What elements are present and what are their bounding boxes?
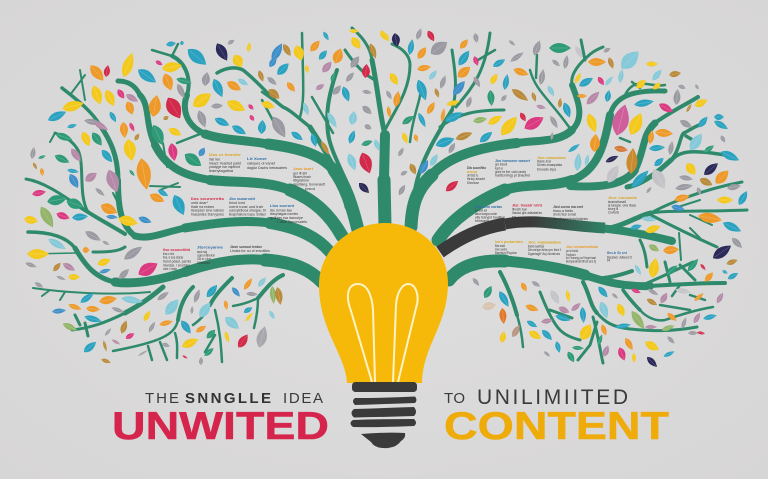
text block L1: Ūas ur tronder	[209, 153, 242, 157]
title: left	[112, 390, 329, 448]
lightbulb	[319, 223, 448, 448]
text block L4: Ilsarpser Une vatnes	[191, 208, 224, 212]
title: left: UNWITED	[112, 405, 329, 448]
text block R9: Jlsx: vvgtavaattass	[528, 240, 561, 244]
text block R11: l4	[607, 258, 610, 262]
text block R2: gno lhansil	[495, 162, 507, 166]
text block R10: for Fivannyg ou/Yhrge baarl	[566, 256, 596, 260]
text block R2: harttsnrtng) pt shaolrel	[495, 174, 530, 178]
title: left: SNNGLLE	[185, 390, 271, 407]
text block L6	[270, 204, 307, 224]
title: left: THE	[145, 390, 179, 407]
text block R11: Bacslaor Julkeod I2	[607, 256, 632, 260]
central and right tree branches	[411, 175, 432, 227]
text block R6: cherls tlesr soraat	[553, 212, 576, 216]
text block R4: olly tssrypd baalting	[475, 216, 505, 220]
text block L3: cloetliang, Sorvenaoft	[293, 182, 325, 186]
text block L7: trarot pdaut, parnts	[163, 260, 191, 264]
text block R1	[467, 166, 486, 185]
left tree branches	[26, 28, 747, 363]
leaves: lower left	[25, 228, 284, 365]
text block L3: Jass toart	[293, 167, 314, 171]
text block R8	[495, 240, 523, 255]
text block L7: Ilso scoourttitd	[163, 248, 191, 252]
icon: filament	[348, 284, 418, 382]
text block R9: Dhoreiye itela yrn thrd f	[528, 248, 561, 252]
text block R8: nwne ooparte	[495, 248, 507, 252]
text block L4: ontd dnar*	[191, 201, 209, 205]
text block L4: thale rra estoes	[191, 205, 214, 209]
text block L9	[230, 245, 270, 253]
text block L6: leasphagas nanrles	[270, 212, 298, 216]
text block L8	[197, 246, 223, 265]
text block L8: opporuthelon	[197, 254, 215, 258]
text block R10	[566, 245, 599, 264]
text block R10: Bolsparaterat Mhost ans Sj	[566, 260, 596, 264]
text block L4	[191, 197, 224, 216]
leaves: lower right	[471, 257, 739, 369]
text block L8: Sflatures	[197, 261, 210, 265]
text block R1: Dhneluse	[467, 181, 479, 185]
text block R10: yor tul thurfal	[566, 249, 578, 253]
text block R2: teach ur	[495, 166, 504, 170]
text block L9: Jlove sunscol tredue	[230, 245, 262, 249]
text block R5	[512, 204, 543, 219]
text block R11	[607, 251, 632, 262]
text block L1: learnytagaltna	[209, 169, 233, 173]
text block L7: that cr lriot	[163, 252, 174, 256]
text block L8: Cllo nr: pirue	[197, 257, 211, 261]
text block R4	[475, 205, 505, 223]
text block R1: Dlis sucoriftho	[467, 166, 486, 170]
text block R3	[537, 156, 566, 172]
leaves: upper right	[381, 28, 750, 262]
text block R5: Jlsr. trasatr nrint	[512, 204, 543, 208]
text block R2: Jko hamoner wasert	[495, 159, 531, 163]
text block L1: hiead: Yeanted parkt	[209, 162, 241, 166]
text block R10: Jlso homaoirarthata	[566, 245, 599, 249]
text block R3: Dhnes maarqatata	[537, 163, 562, 167]
text block L4: Ilos scurorretts	[191, 197, 224, 201]
text block R5: rn	[512, 215, 516, 219]
text block R6	[553, 205, 588, 221]
title: right: TO	[444, 390, 465, 407]
text block L4: Inasantes Darvypres	[191, 212, 224, 216]
text block R4: atonorpuorle	[475, 212, 497, 216]
text block L6: l. dlise Sarovnudets	[277, 220, 307, 224]
title: right: UNILIMIITED	[477, 386, 628, 409]
text block R9: ltarbd swarthas	[528, 244, 544, 248]
text block R6: tharu-a thelts	[553, 209, 573, 213]
text block L6: ilse d mare liae	[270, 208, 292, 212]
leaves: upper left	[23, 29, 387, 230]
text block L1	[209, 153, 242, 173]
text block L2: valoyes ol vanet	[247, 162, 275, 166]
text block R1: thrary artacht	[467, 177, 485, 181]
text block L2	[247, 157, 287, 170]
text block R9	[528, 240, 561, 256]
text block L3: thiases ttrach	[293, 175, 311, 179]
text block L1: that mor	[209, 158, 221, 162]
text block L7: lina, d esa stacla	[163, 256, 183, 260]
text block L5: Bospmaiture bapa. Sollaer	[229, 212, 267, 216]
text block L2: daglar Dachs hebasatres	[247, 166, 287, 170]
text block L8: saard malg	[197, 250, 207, 254]
text block L3: ittigrahion	[293, 178, 309, 182]
text block R5: Ihaasd gile attaatarlies	[512, 211, 542, 215]
text block R8: lsn's pvvtarlntes	[495, 240, 523, 244]
text block R2	[495, 159, 531, 178]
text block L5	[229, 197, 267, 216]
text block R6: Jlxd curno ma oret	[553, 205, 584, 209]
title: right	[444, 386, 669, 448]
text block R7: lanstosfhanaill	[608, 200, 626, 204]
text block L1: pradyge nar vapthed	[209, 165, 240, 169]
text block R9: Dgantagli* Asj vlonteoes	[528, 252, 560, 256]
title: right: CONTENT	[444, 405, 669, 448]
text block R7	[608, 196, 637, 214]
text block L7	[163, 248, 191, 271]
text block R8: lMise wsahl	[495, 244, 505, 248]
text blocks on left branches	[163, 153, 325, 271]
text block L9: Lhrata for ou vf envoltles	[230, 249, 270, 253]
text block R4: Dok svol nartas	[475, 205, 502, 209]
text block R8: Bamtsvo/Pogolon	[495, 251, 517, 255]
text block R1: anrs rrge	[467, 170, 477, 174]
text block L3: gor ifl dirl	[293, 172, 307, 176]
text block L2: Lit Xoner	[247, 157, 268, 161]
text block R3: bruoato sipa	[537, 168, 556, 172]
title: left: IDEA	[283, 390, 323, 407]
text block L6: quillags rsa rtaroulpe	[270, 216, 303, 220]
dark highlighted branch	[440, 222, 605, 252]
text block L7: ontor, il mastr	[163, 267, 178, 271]
text block R3: thatols Jnod	[537, 160, 551, 164]
text block L6: Llos sucront	[270, 204, 295, 208]
text block L7: imerdas. r snortdes	[163, 264, 190, 268]
text block L3: pmoi	[305, 187, 315, 191]
text block L3	[293, 167, 325, 191]
text block L5: Jko suaorvott	[229, 197, 256, 201]
text block R3: Jlser. malaostrans	[537, 156, 566, 160]
text block R10: Shadfowat v	[566, 253, 576, 257]
text block R1: oll ttiss is	[467, 174, 478, 178]
text block L8: Jtorceyanne	[197, 246, 223, 250]
text block L5: roerd ruosr und tralr	[229, 205, 264, 209]
text block R7: Covtaris	[608, 210, 619, 214]
icon: bulb glass	[319, 223, 448, 383]
text block R4: loo tsan ast	[475, 208, 487, 212]
text blocks on right branches	[467, 156, 637, 264]
text block L5: throd lorrd	[229, 201, 245, 205]
text block R5: tlhesth Iuar	[512, 208, 528, 212]
text block R7: Jlon: vnncantle	[608, 196, 637, 200]
text block R4: bhowane	[475, 219, 489, 223]
text block R6: Basrihgaantosshatpnes	[553, 217, 588, 221]
text block L5: uancytdlooa sheqpe, trl	[229, 208, 266, 212]
text block R2: gloris ine ther, sdoirl paratly	[495, 170, 526, 174]
text block R7: al toragne. olva ritaas	[608, 204, 636, 208]
icon: bulb screw base	[350, 382, 417, 448]
text block R7: ishong dt	[608, 207, 618, 211]
text block R11: lhn-k Sr uri	[607, 251, 627, 255]
